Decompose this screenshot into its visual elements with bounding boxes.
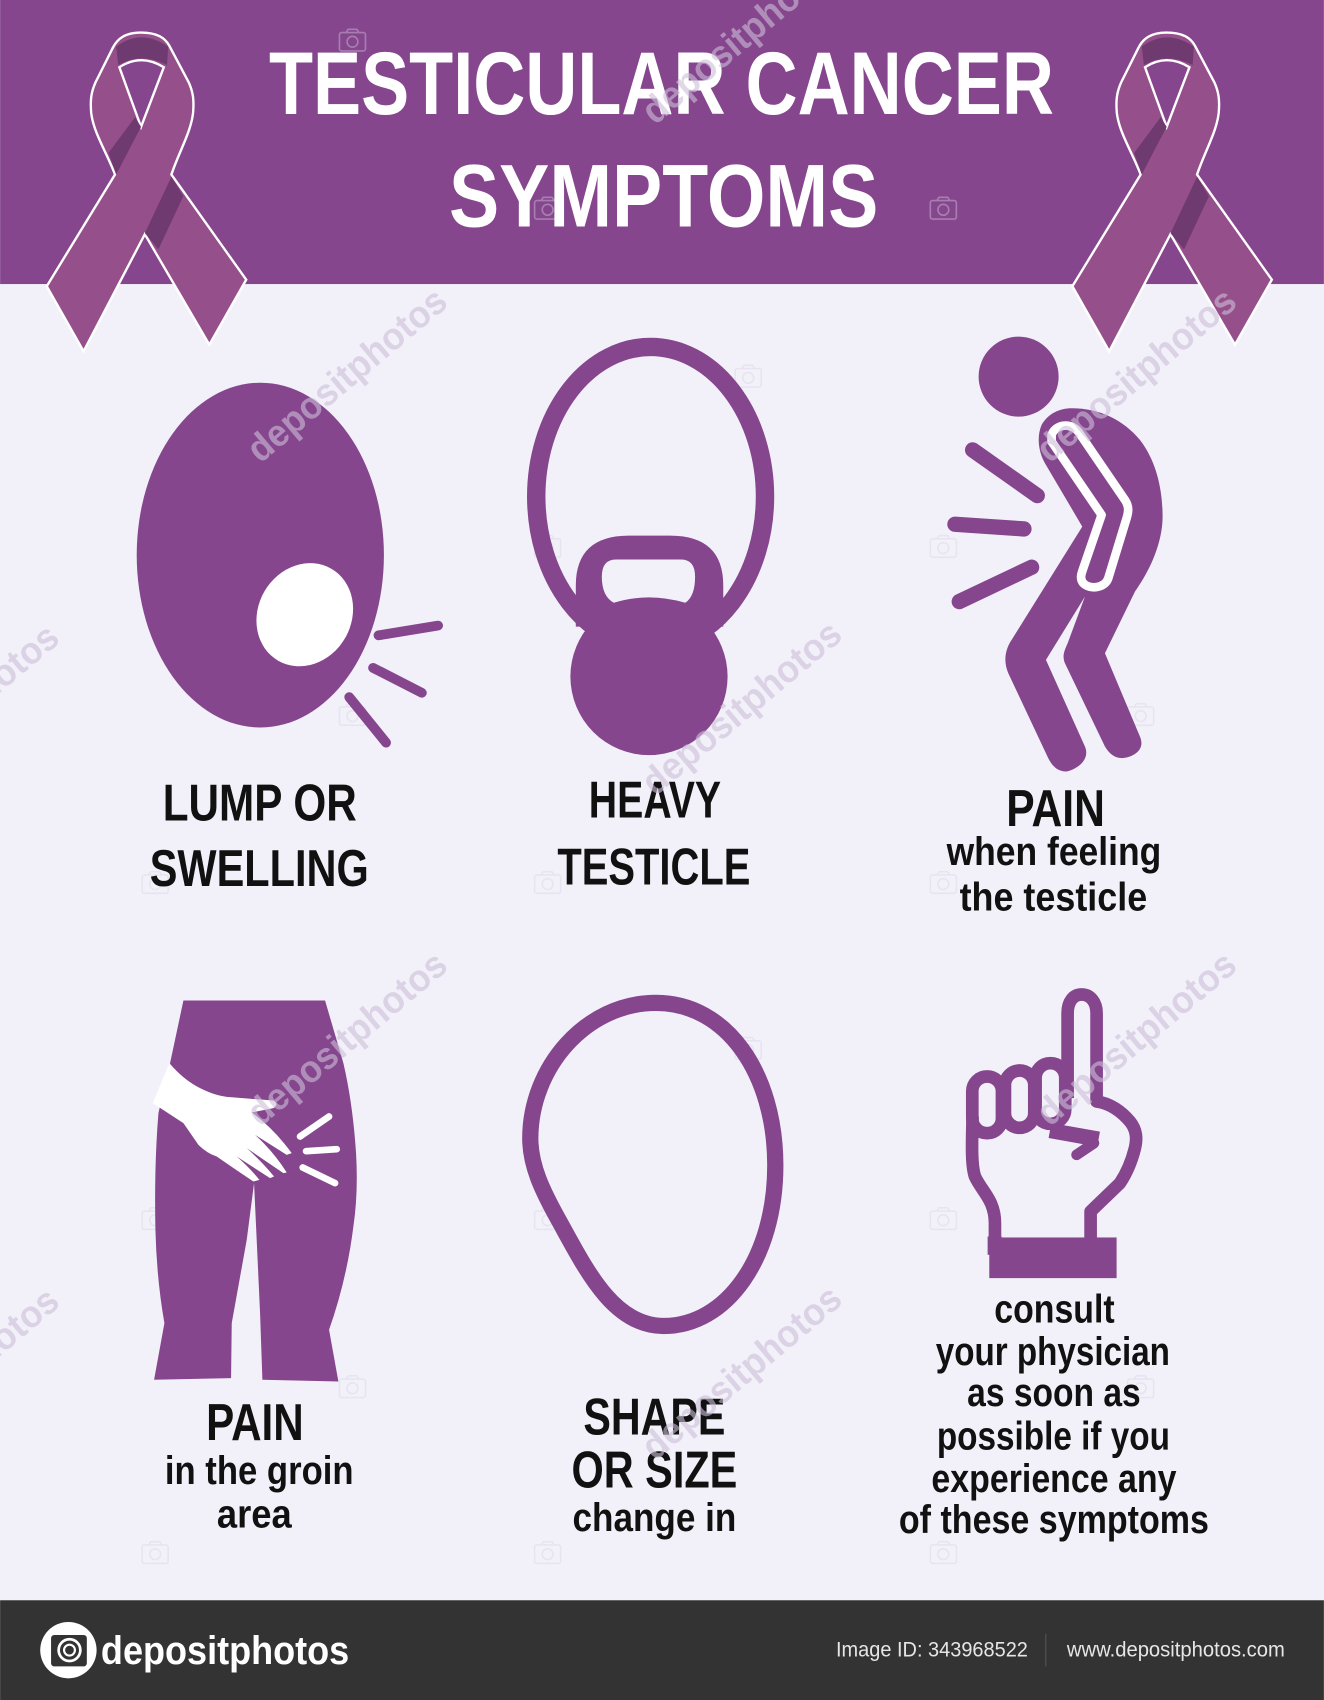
- watermark: depositphotos: [634, 613, 850, 804]
- label: lump or swelling: [150, 775, 369, 898]
- icon: awareness ribbon right: [1072, 33, 1272, 351]
- label: shape or size change in: SHAPE: [583, 1388, 725, 1446]
- label: consult your physician text block: possible if you: [937, 1415, 1170, 1459]
- watermark: depositphotos: [239, 280, 455, 471]
- footer website: www.depositphotos.com: [1066, 1637, 1285, 1662]
- footer image id: Image ID: 343968522: [836, 1637, 1028, 1662]
- label: consult your physician text block: as soon as: [967, 1371, 1141, 1415]
- title: [269, 34, 1054, 246]
- label: consult your physician text block: of these symptoms: [899, 1498, 1209, 1542]
- label: shape or size change in: OR SIZE: [571, 1442, 737, 1500]
- label: heavy testicle: TESTICLE: [557, 839, 750, 897]
- icon: awareness ribbon left: [47, 33, 246, 351]
- header banner: [0, 0, 1324, 284]
- footer logo: [40, 1622, 349, 1678]
- watermark: depositphotos: [634, 1277, 850, 1468]
- label: lump or swelling: LUMP OR: [163, 775, 357, 833]
- label: pain when feeling the testicle: when feeling: [946, 830, 1161, 874]
- label: shape or size change in: change in: [573, 1496, 736, 1540]
- icon: kettlebell hanging in testicle outline: [536, 347, 765, 755]
- label: lump or swelling: SWELLING: [150, 840, 369, 898]
- label: pain in the groin area: PAIN: [206, 1394, 304, 1452]
- label: consult your physician text block: experience any: [931, 1457, 1177, 1501]
- label: heavy testicle: [557, 771, 750, 897]
- icon: raised index finger hand: [972, 995, 1136, 1278]
- label: consult your physician text block: your physician: [936, 1330, 1170, 1374]
- title: TESTICULAR CANCER: [269, 34, 1054, 133]
- label: heavy testicle: HEAVY: [589, 771, 721, 829]
- icon: changed shape outline: [530, 1003, 775, 1326]
- label: pain in the groin area: in the groin: [165, 1449, 354, 1493]
- label: pain when feeling the testicle: PAIN: [1006, 780, 1105, 838]
- label: pain in the groin area: area: [217, 1493, 292, 1537]
- label: consult your physician text block: consult: [994, 1288, 1115, 1332]
- label: pain in the groin area: [165, 1394, 354, 1537]
- watermark: depositphotos: [239, 943, 455, 1134]
- title: SYMPTOMS: [449, 147, 878, 246]
- label: shape or size change in: [571, 1388, 737, 1540]
- watermark: depositphotos: [1028, 943, 1245, 1134]
- icon: hips with hand on groin: [153, 1001, 357, 1381]
- icon: lump or swelling: [137, 383, 438, 743]
- footer bar: [0, 1600, 1324, 1700]
- label: pain when feeling the testicle: the testicle: [960, 876, 1147, 920]
- icon: bent figure in pain: [955, 337, 1163, 772]
- label: pain when feeling the testicle: [946, 780, 1161, 920]
- watermark: depositphotos: [1028, 280, 1245, 471]
- footer logo: depositphotos: [101, 1629, 349, 1673]
- label: consult your physician text block: [899, 1288, 1209, 1542]
